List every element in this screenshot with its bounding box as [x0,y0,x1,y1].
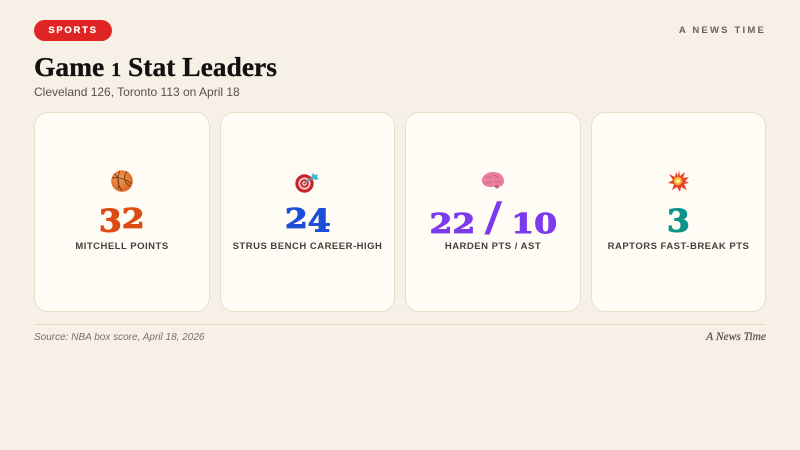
stat: 32 [99,204,145,239]
brand name: A NEWS TIME [679,25,766,36]
label: Harden pts / ast: HARDEN PTS / AST [445,240,541,252]
title: Game 1 Stat Leaders [34,50,277,82]
badge: sports: SPORTS [48,25,98,36]
brand signature: A News Time [706,330,766,342]
label: Mitchell points: MITCHELL POINTS [75,240,169,252]
stat: 24: 2 [285,204,308,235]
icon: brain [482,172,504,188]
source note: Source: NBA box score, April 18, 2026 [34,332,204,342]
icon: basketball [111,170,133,192]
subtitle: Cleveland 126, Toronto 113 on April 18 [34,84,240,98]
badge: sports [34,20,112,41]
stat: 32: 3 [99,204,122,239]
panel: Mitchell points [34,112,210,312]
panel: Strus bench career-high [220,112,395,312]
icon: collision [668,170,689,192]
panel: Harden pts / ast [405,112,581,312]
stat: 3: 3 [667,204,690,239]
stat: 24: 4 [308,204,330,239]
stat: 22 / 10: 22 / 10 [429,194,557,241]
label: Strus bench career-high: STRUS BENCH CAREER-HIGH [233,240,382,252]
label: Raptors fast-break pts: RAPTORS FAST-BREAK PTS [608,240,749,252]
icon: dart target [295,173,319,193]
stat: 24 [285,204,330,239]
panel: Raptors fast-break pts [591,112,766,312]
stat: 32: 2 [122,204,145,235]
